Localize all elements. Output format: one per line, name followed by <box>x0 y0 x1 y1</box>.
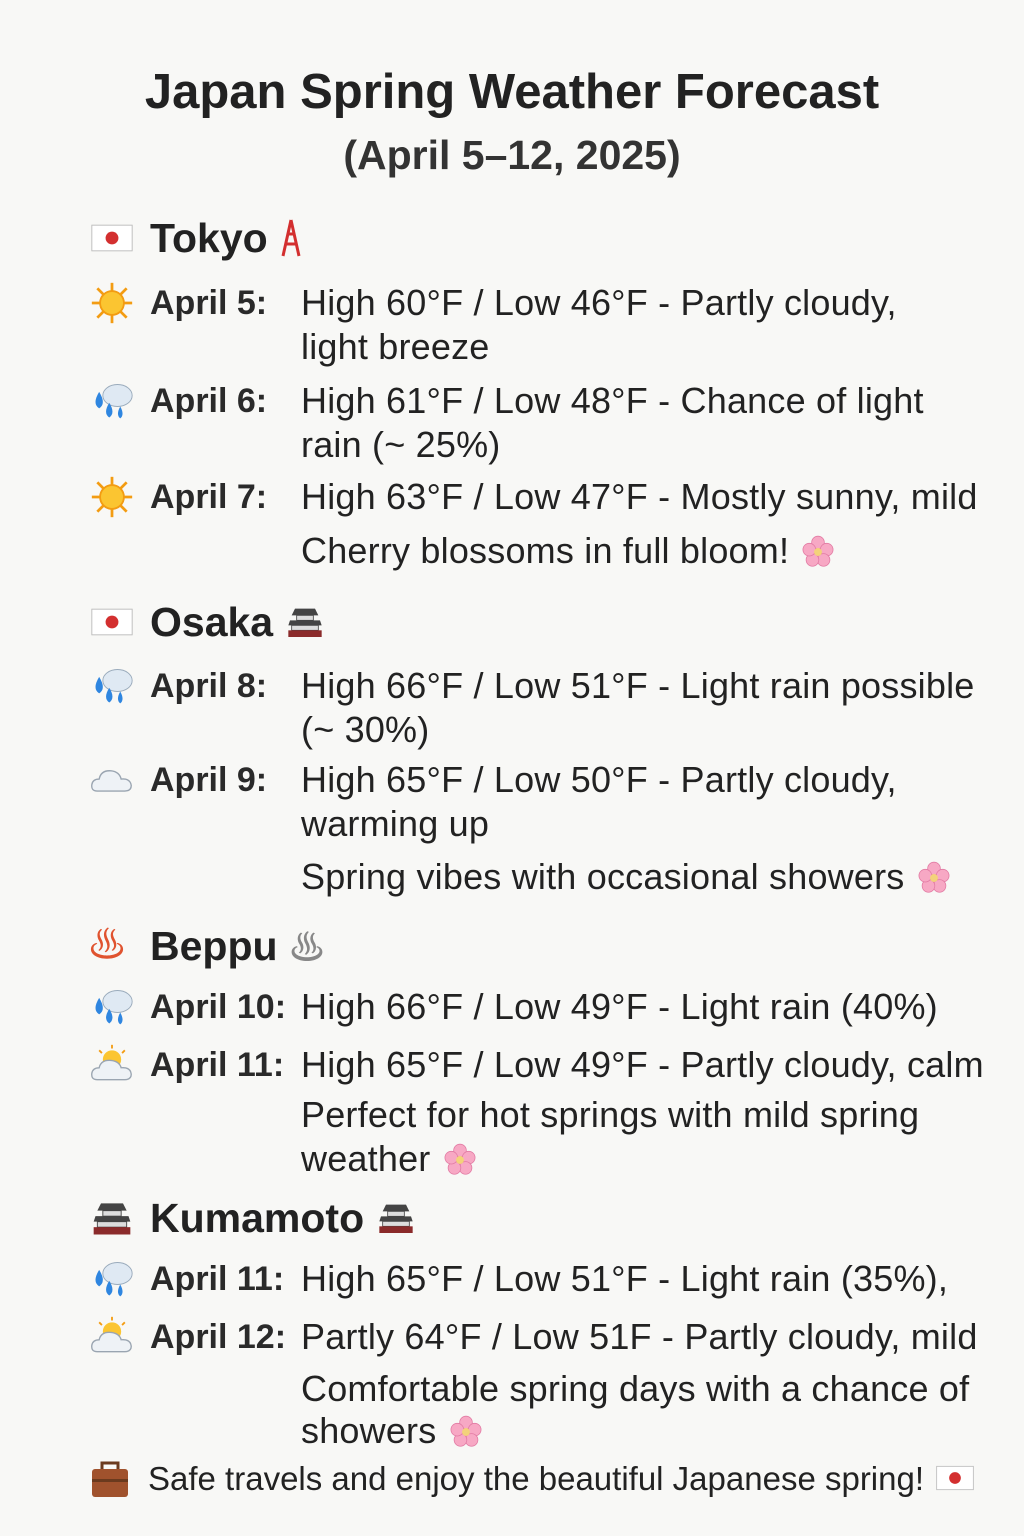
icon: castle <box>94 1203 130 1234</box>
forecast: April 11: High 65°F / Low 51°F - Light rain (35%), <box>301 1258 948 1299</box>
note: Beppu <box>301 1094 919 1179</box>
section: Beppu <box>88 923 984 1179</box>
icon: sun <box>92 282 132 324</box>
date: April 10: April 10: <box>150 988 286 1026</box>
icon: suitcase <box>92 1462 128 1497</box>
forecast: April 10: High 66°F / Low 49°F - Light rain (40%) <box>301 986 938 1027</box>
icon: sun behind cloud <box>91 1316 132 1352</box>
note: Kumamoto <box>301 1368 970 1451</box>
icon: rain <box>96 990 133 1024</box>
icon: hot springs: ♨ <box>88 925 126 967</box>
section: Tokyo: rain (~ 25%) <box>301 424 500 465</box>
icon: rain <box>96 1262 133 1296</box>
heading: Osaka: Osaka <box>150 599 273 645</box>
heading: Tokyo: Tokyo <box>150 215 268 261</box>
icon: flag <box>91 224 133 252</box>
date: April 5: April 5: <box>150 284 267 322</box>
icon: cloud <box>91 770 132 792</box>
date: April 9: April 9: <box>150 761 267 799</box>
icon: rain <box>96 384 133 418</box>
date: April 11: April 11: <box>150 1260 284 1298</box>
section: Beppu: weather <box>301 1138 430 1179</box>
subtitle: (April 5–12, 2025) <box>343 132 681 178</box>
date: April 8: April 8: <box>150 667 267 705</box>
forecast: April 5 <box>301 282 897 367</box>
forecast: April 11: High 65°F / Low 49°F - Partly cloudy, calm <box>301 1044 984 1085</box>
section: Osaka <box>91 599 975 897</box>
date: April 7: April 7: <box>150 478 267 516</box>
section: Osaka: warming up <box>301 803 489 844</box>
heading: Beppu: Beppu ♨ <box>150 923 325 969</box>
icon: sun <box>92 476 132 518</box>
forecast: April 8: High 66°F / Low 51°F - Light rain possible <box>301 665 975 706</box>
date: April 12: April 12: <box>150 1318 286 1356</box>
icon: flag <box>91 608 133 636</box>
icon: sun behind cloud <box>91 1044 132 1080</box>
note: Beppu: Perfect for hot springs with mild spring <box>301 1094 919 1135</box>
forecast: April 12: Partly 64°F / Low 51F - Partly cloudy, mild <box>301 1316 978 1357</box>
footer <box>92 1460 974 1497</box>
title: Japan Spring Weather Forecast <box>145 65 879 119</box>
note: Kumamoto: Comfortable spring days with a chance of <box>301 1368 969 1409</box>
section: Tokyo: light breeze <box>301 326 490 367</box>
section: Kumamoto: showers <box>301 1410 436 1451</box>
section: Tokyo <box>91 215 978 571</box>
forecast: April 9: High 65°F / Low 50°F - Partly cloudy, <box>301 759 897 800</box>
footer text: Safe travels and enjoy the beautiful Japanese spring! <box>148 1460 924 1497</box>
date: April 11: April 11: <box>150 1046 284 1084</box>
forecast: April 9 <box>301 759 897 844</box>
forecast: April 8 <box>301 665 975 750</box>
forecast: April 7: High 63°F / Low 47°F - Mostly sunny, mild <box>301 476 978 517</box>
note: Tokyo: Cherry blossoms in full bloom! <box>301 530 789 571</box>
forecast: April 6 <box>301 380 924 465</box>
date: April 6: April 6: <box>150 382 267 420</box>
forecast: April 5: High 60°F / Low 46°F - Partly cloudy, <box>301 282 897 323</box>
section: Kumamoto <box>91 1195 978 1451</box>
heading: Kumamoto: Kumamoto <box>150 1195 364 1241</box>
section: Osaka: (~ 30%) <box>301 709 429 750</box>
note: Osaka: Spring vibes with occasional showers <box>301 856 904 897</box>
forecast: April 6: High 61°F / Low 48°F - Chance of light <box>301 380 924 421</box>
icon: rain <box>96 669 133 704</box>
